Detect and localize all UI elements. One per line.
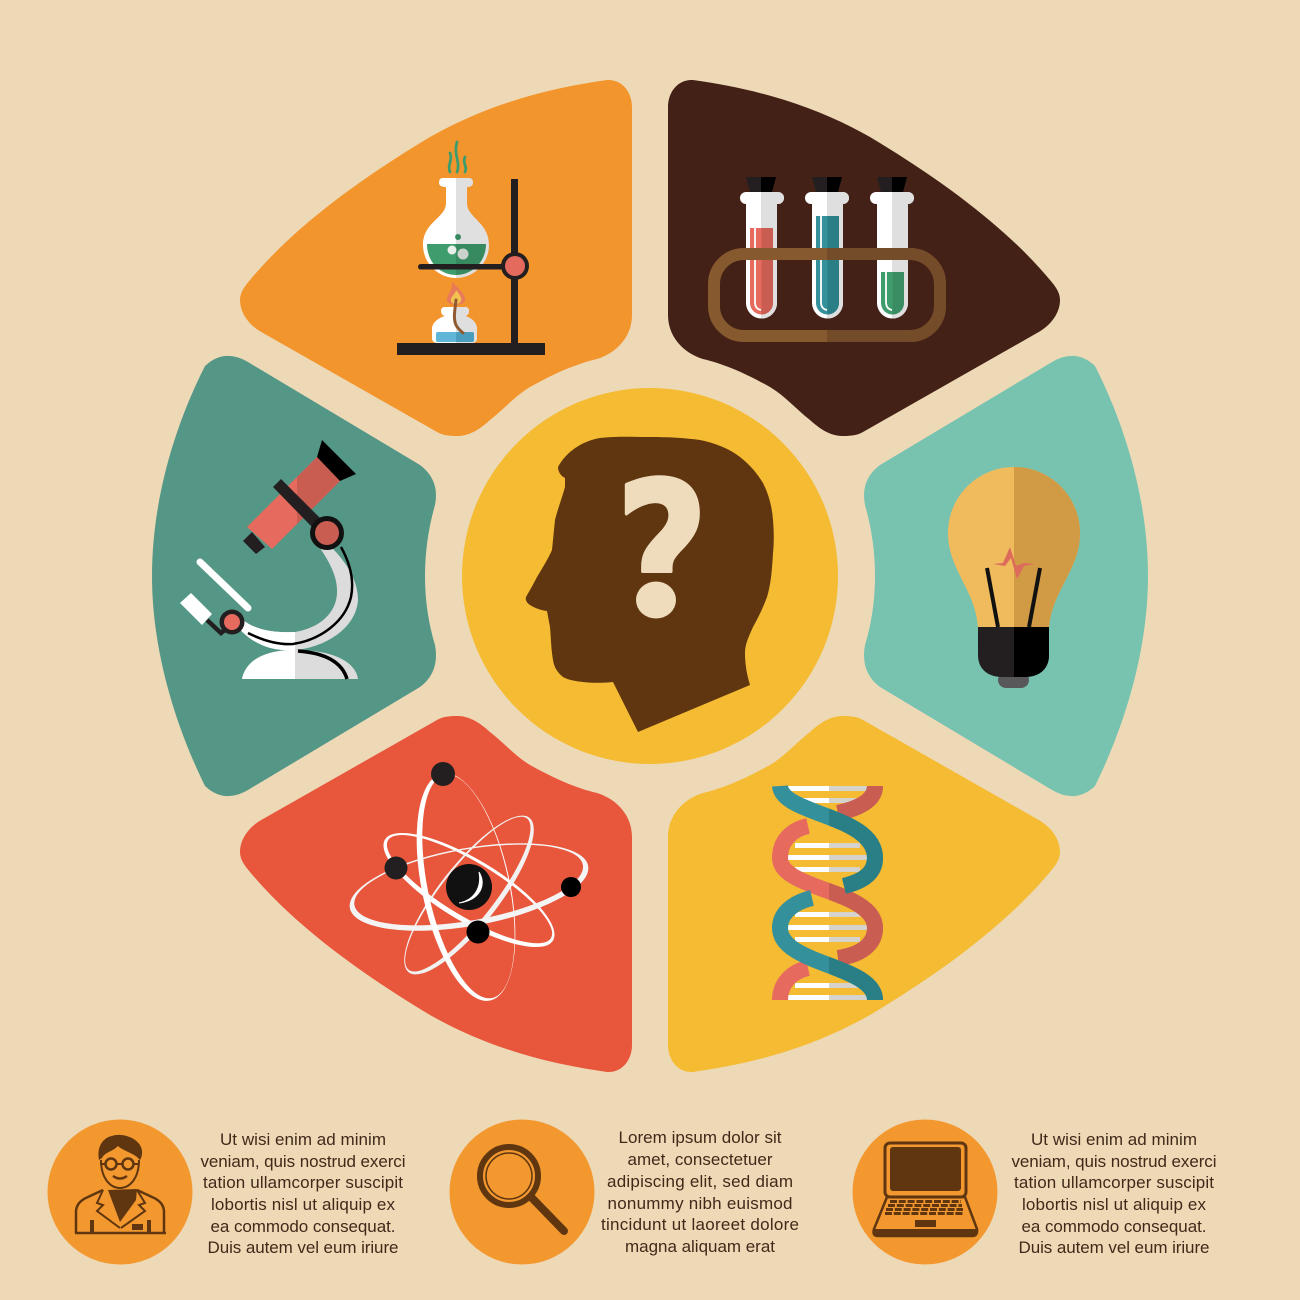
text block: left: veniam, quis nostrud exerci	[200, 1152, 406, 1171]
icon: magnifying glass	[480, 1147, 564, 1231]
icon: light bulb	[948, 467, 1080, 688]
text block: left: lobortis nisl ut aliquip ex	[211, 1195, 396, 1214]
keyboard	[885, 1202, 964, 1214]
text block: middle: magna aliquam erat	[625, 1237, 775, 1256]
bottom item: scientist	[48, 1120, 192, 1264]
text block: right: Duis autem vel eum iriure	[1018, 1238, 1210, 1257]
panel: flask segment	[240, 80, 632, 436]
text block: left: Duis autem vel eum iriure	[208, 1238, 398, 1257]
text block: right: lobortis nisl ut aliquip ex	[1022, 1195, 1206, 1214]
center circle with head and question mark	[462, 388, 838, 764]
panel: test tubes segment	[668, 80, 1060, 436]
icon: scientist	[75, 1135, 166, 1233]
icon: microscope	[180, 440, 358, 679]
text block: middle: amet, consectetuer	[628, 1150, 773, 1169]
panel: DNA segment	[668, 716, 1060, 1072]
text block: left: ea commodo consequat.	[210, 1217, 396, 1236]
DNA strands	[780, 786, 875, 1000]
text block: middle	[601, 1128, 799, 1256]
text block: right: ea commodo consequat.	[1022, 1217, 1206, 1236]
icon: atom	[343, 762, 595, 1010]
orbit: upper-right to lower-left	[385, 799, 553, 991]
question mark	[624, 475, 700, 618]
icon: head silhouette	[526, 437, 774, 732]
text block: right: veniam, quis nostrud exerci	[1012, 1152, 1216, 1171]
test tube: teal	[805, 177, 849, 319]
text block: middle: nonummy nibh euismod	[608, 1194, 792, 1213]
icon: DNA helix	[780, 786, 875, 1000]
text block: middle: tincidunt ut laoreet dolore	[601, 1215, 799, 1234]
test tube: red	[740, 177, 784, 319]
text block: middle: Lorem ipsum dolor sit	[618, 1128, 782, 1147]
icon: laptop	[873, 1143, 977, 1236]
panel: atom segment	[240, 716, 632, 1072]
text block: right: tation ullamcorper suscipit	[1014, 1173, 1214, 1192]
orbit: horizontal	[343, 828, 595, 946]
text block: left	[200, 1130, 406, 1257]
orbit: upper-left to lower-right	[369, 813, 569, 967]
icon: flask on stand with burner	[397, 142, 545, 355]
orbit: vertical	[399, 764, 533, 1010]
DNA rungs	[787, 786, 868, 1000]
panel: light bulb segment	[864, 356, 1148, 796]
panel: microscope segment	[152, 356, 436, 796]
bottom item: laptop	[852, 1120, 998, 1264]
icon: three test tubes in a rack	[714, 177, 940, 336]
question mark: ?	[615, 441, 709, 663]
text block: left: tation ullamcorper suscipit	[203, 1173, 403, 1192]
test tube rack	[714, 254, 940, 336]
text block: left: Ut wisi enim ad minim	[220, 1130, 386, 1149]
text block: middle: adipiscing elit, sed diam	[607, 1172, 793, 1191]
test tube: green	[870, 177, 914, 319]
text block: right	[1012, 1130, 1216, 1257]
text block: right: Ut wisi enim ad minim	[1031, 1130, 1197, 1149]
bottom item: magnifier	[450, 1120, 594, 1264]
